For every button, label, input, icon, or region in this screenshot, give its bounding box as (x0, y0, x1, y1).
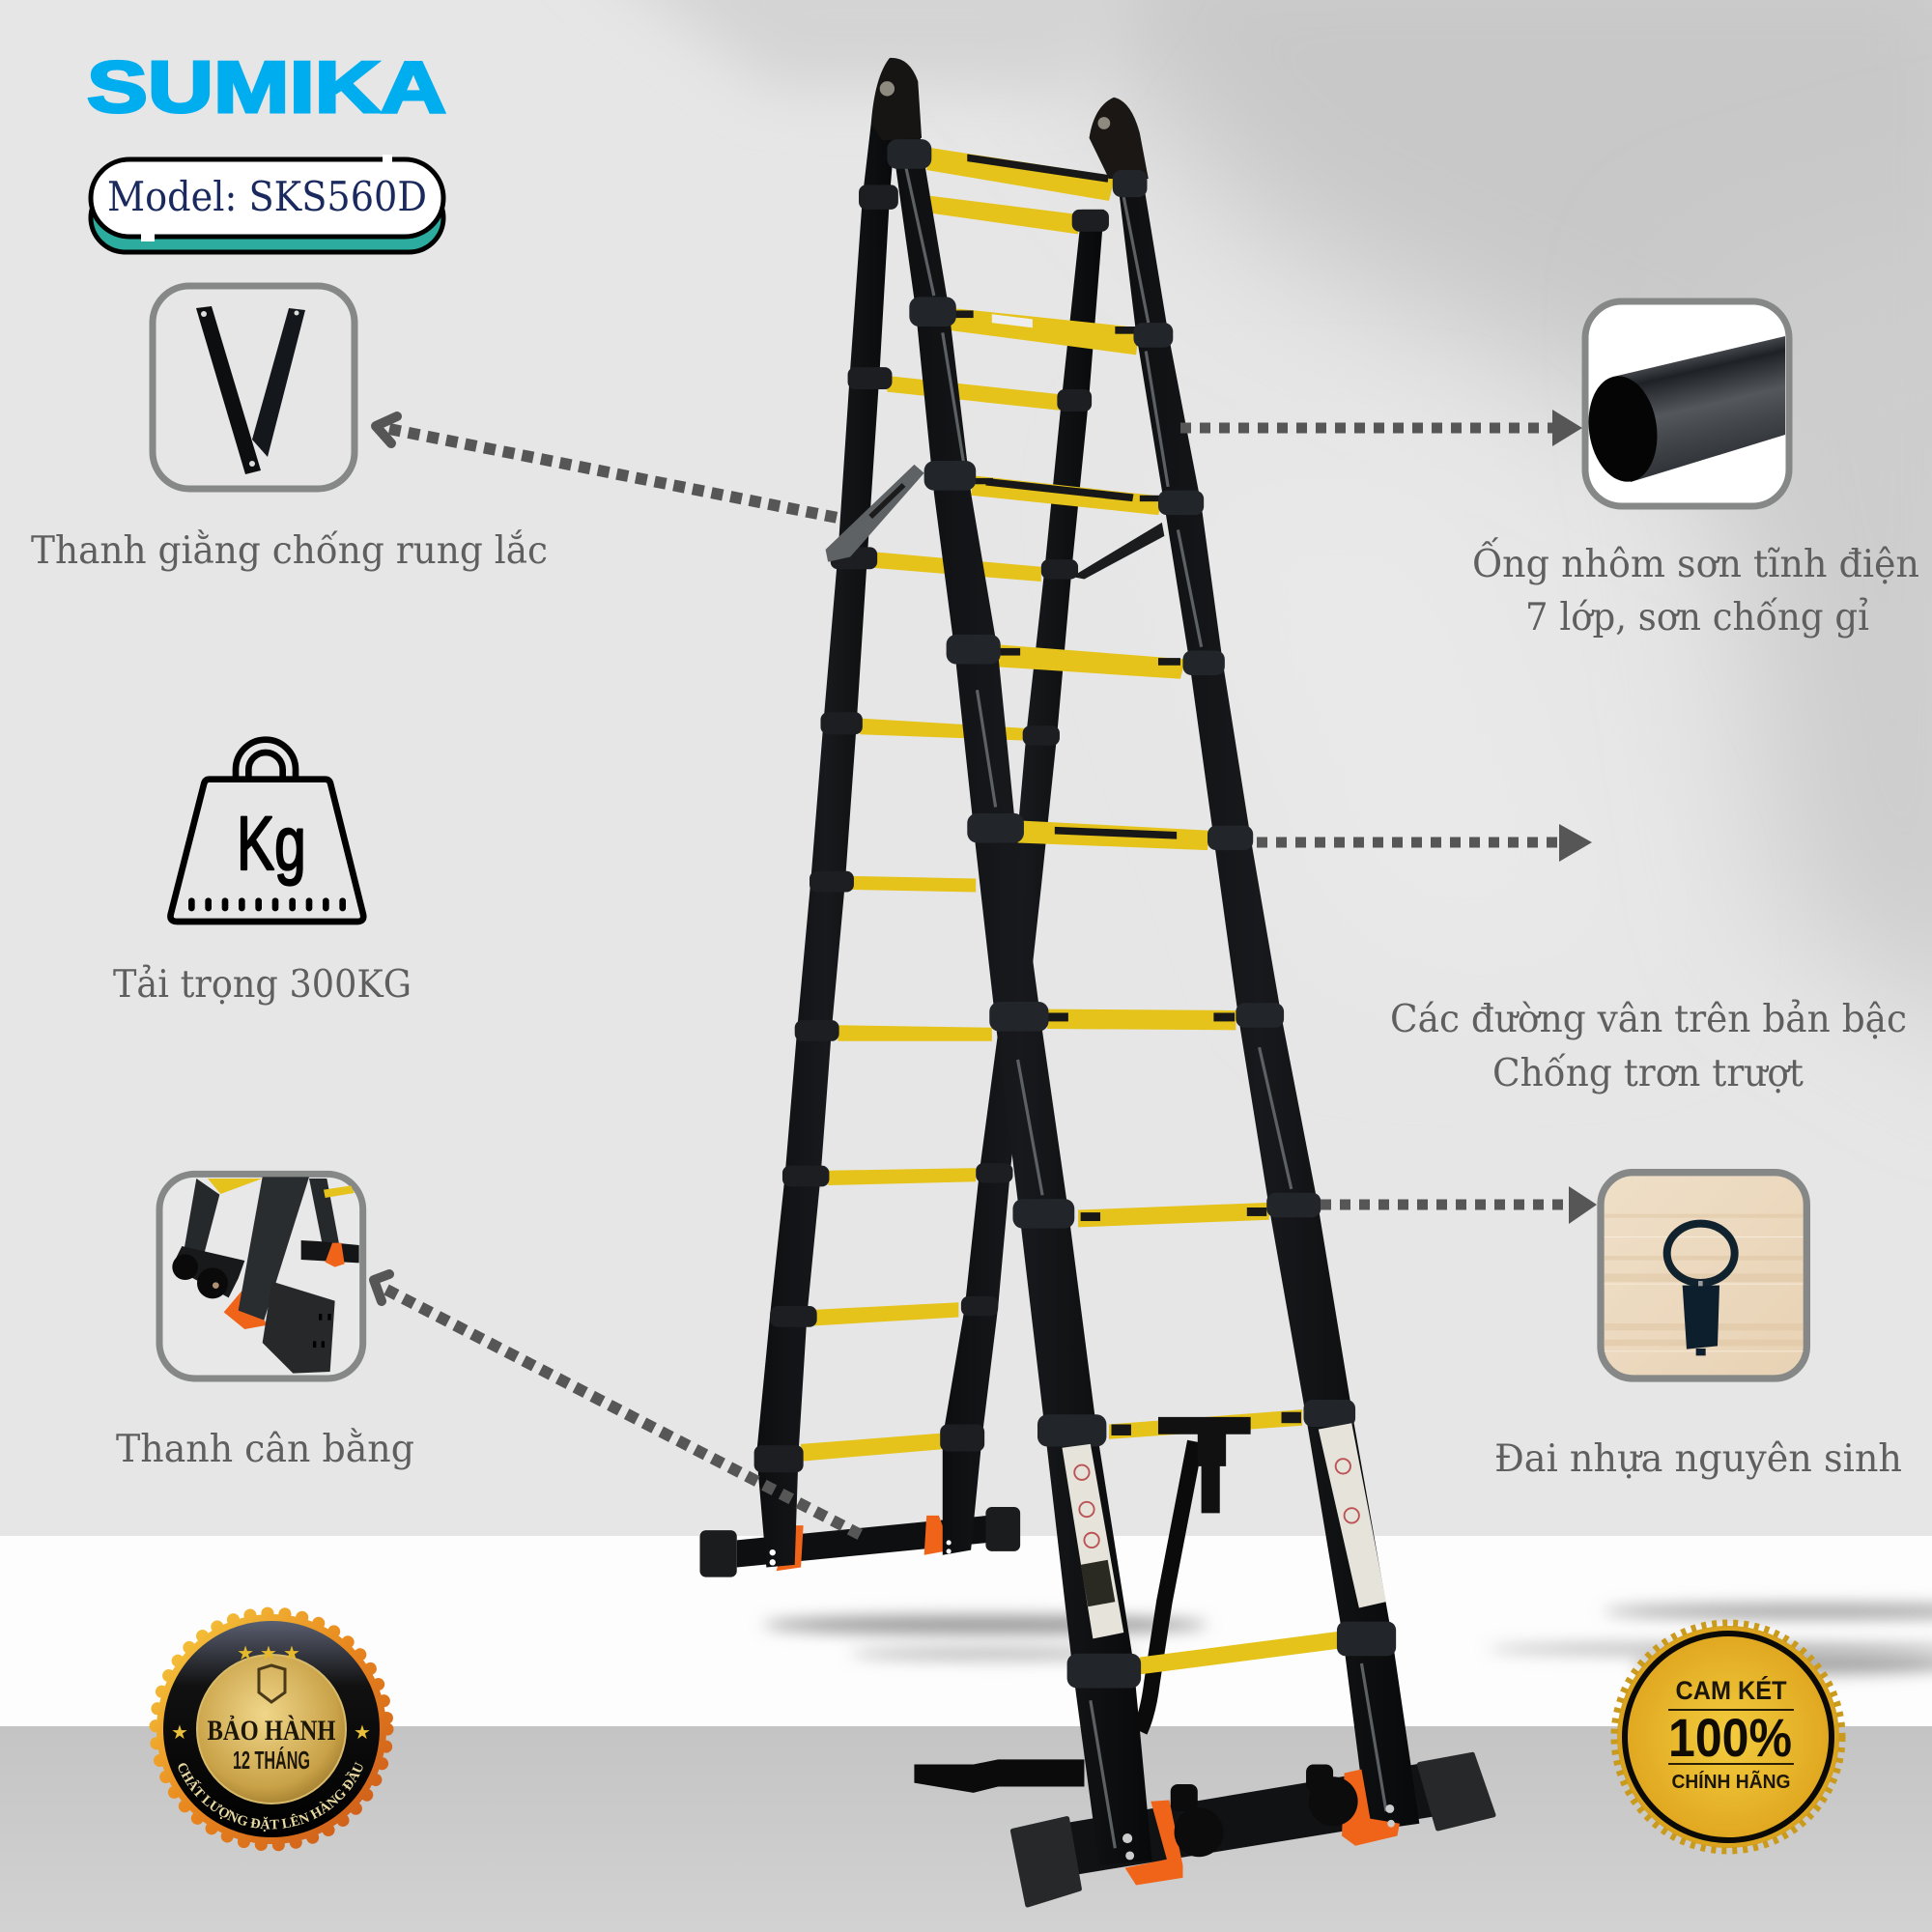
floor white band (0, 1536, 1932, 1726)
rail highlights (904, 160, 1386, 1848)
weight unit: Kg (237, 800, 306, 886)
warranty text: BẢO HÀNH (207, 1715, 336, 1747)
badge: warranty: ★ (171, 1720, 188, 1744)
badge: warranty: 12 THÁNG (233, 1746, 310, 1775)
badge: warranty (149, 1607, 394, 1851)
caption: clamp: Đai nhựa nguyên sinh (1494, 1437, 1902, 1481)
icon: tube (1582, 336, 1785, 486)
badge: authentic: CHÍNH HÃNG (1671, 1771, 1791, 1793)
panel: plastic clamp (1601, 1173, 1806, 1378)
rung markings (952, 154, 1301, 1435)
caption: balance bar: Thanh cân bằng (116, 1428, 414, 1471)
icon: clamp (1667, 1224, 1735, 1355)
floor grey (0, 1726, 1932, 1932)
icon: shield (259, 1665, 285, 1702)
authentic text: CAM KÉT (1675, 1675, 1787, 1705)
curved slogan: CHẤT LƯỢNG ĐẶT LÊN HÀNG ĐẦU (178, 1762, 363, 1832)
front frame (871, 58, 1493, 1905)
back base (699, 1507, 1020, 1577)
panel: brace bar (153, 286, 355, 489)
photo: stabiliser feet (172, 1177, 359, 1374)
arrow: brace bar (376, 416, 838, 518)
arrow: tube (1180, 410, 1582, 446)
hinges (871, 58, 922, 140)
caption: load: Tải trọng 300KG (113, 963, 412, 1007)
logo: SUMIKA (87, 46, 446, 128)
icon: V brace (196, 306, 305, 474)
ladder (699, 58, 1493, 1905)
caption: tread: Chống trơn trượt (1492, 1052, 1804, 1095)
stars: ★★★ (237, 1641, 306, 1664)
caption: tube: Ống nhôm sơn tĩnh điện (1472, 537, 1919, 586)
arrow: clamp (1321, 1186, 1597, 1224)
brace arms (826, 465, 924, 562)
front clamps (887, 139, 1396, 1688)
caption: brace bar: Thanh giằng chống rung lắc (31, 529, 548, 573)
back rungs (801, 196, 1078, 1462)
base latches (1122, 1765, 1400, 1886)
caption: tread (1390, 998, 1907, 1095)
safety stickers (1062, 1423, 1386, 1638)
model badge (91, 155, 443, 252)
caption: tread: Các đường vân trên bản bậc (1390, 998, 1907, 1041)
back frame (699, 124, 1164, 1577)
front base (1012, 1754, 1493, 1905)
badge: authentic: 100% (1668, 1707, 1792, 1768)
panel: aluminium tube (1582, 301, 1789, 506)
panel: balance bar (159, 1174, 363, 1378)
caption: tube (1472, 537, 1919, 639)
badge: warranty: ★ (354, 1720, 371, 1744)
back clamps (754, 185, 1109, 1472)
arrow: balance bar (374, 1274, 863, 1536)
arrow: tread (1257, 824, 1592, 862)
icon: weight (170, 740, 363, 922)
strap buckle (1158, 1417, 1251, 1513)
straps (1140, 1441, 1195, 1731)
caption: tube: 7 lớp, sơn chống gỉ (1525, 596, 1869, 639)
badge: authentic (1614, 1623, 1842, 1851)
front rungs (926, 148, 1339, 1674)
model text: Model: SKS560D (107, 173, 427, 220)
